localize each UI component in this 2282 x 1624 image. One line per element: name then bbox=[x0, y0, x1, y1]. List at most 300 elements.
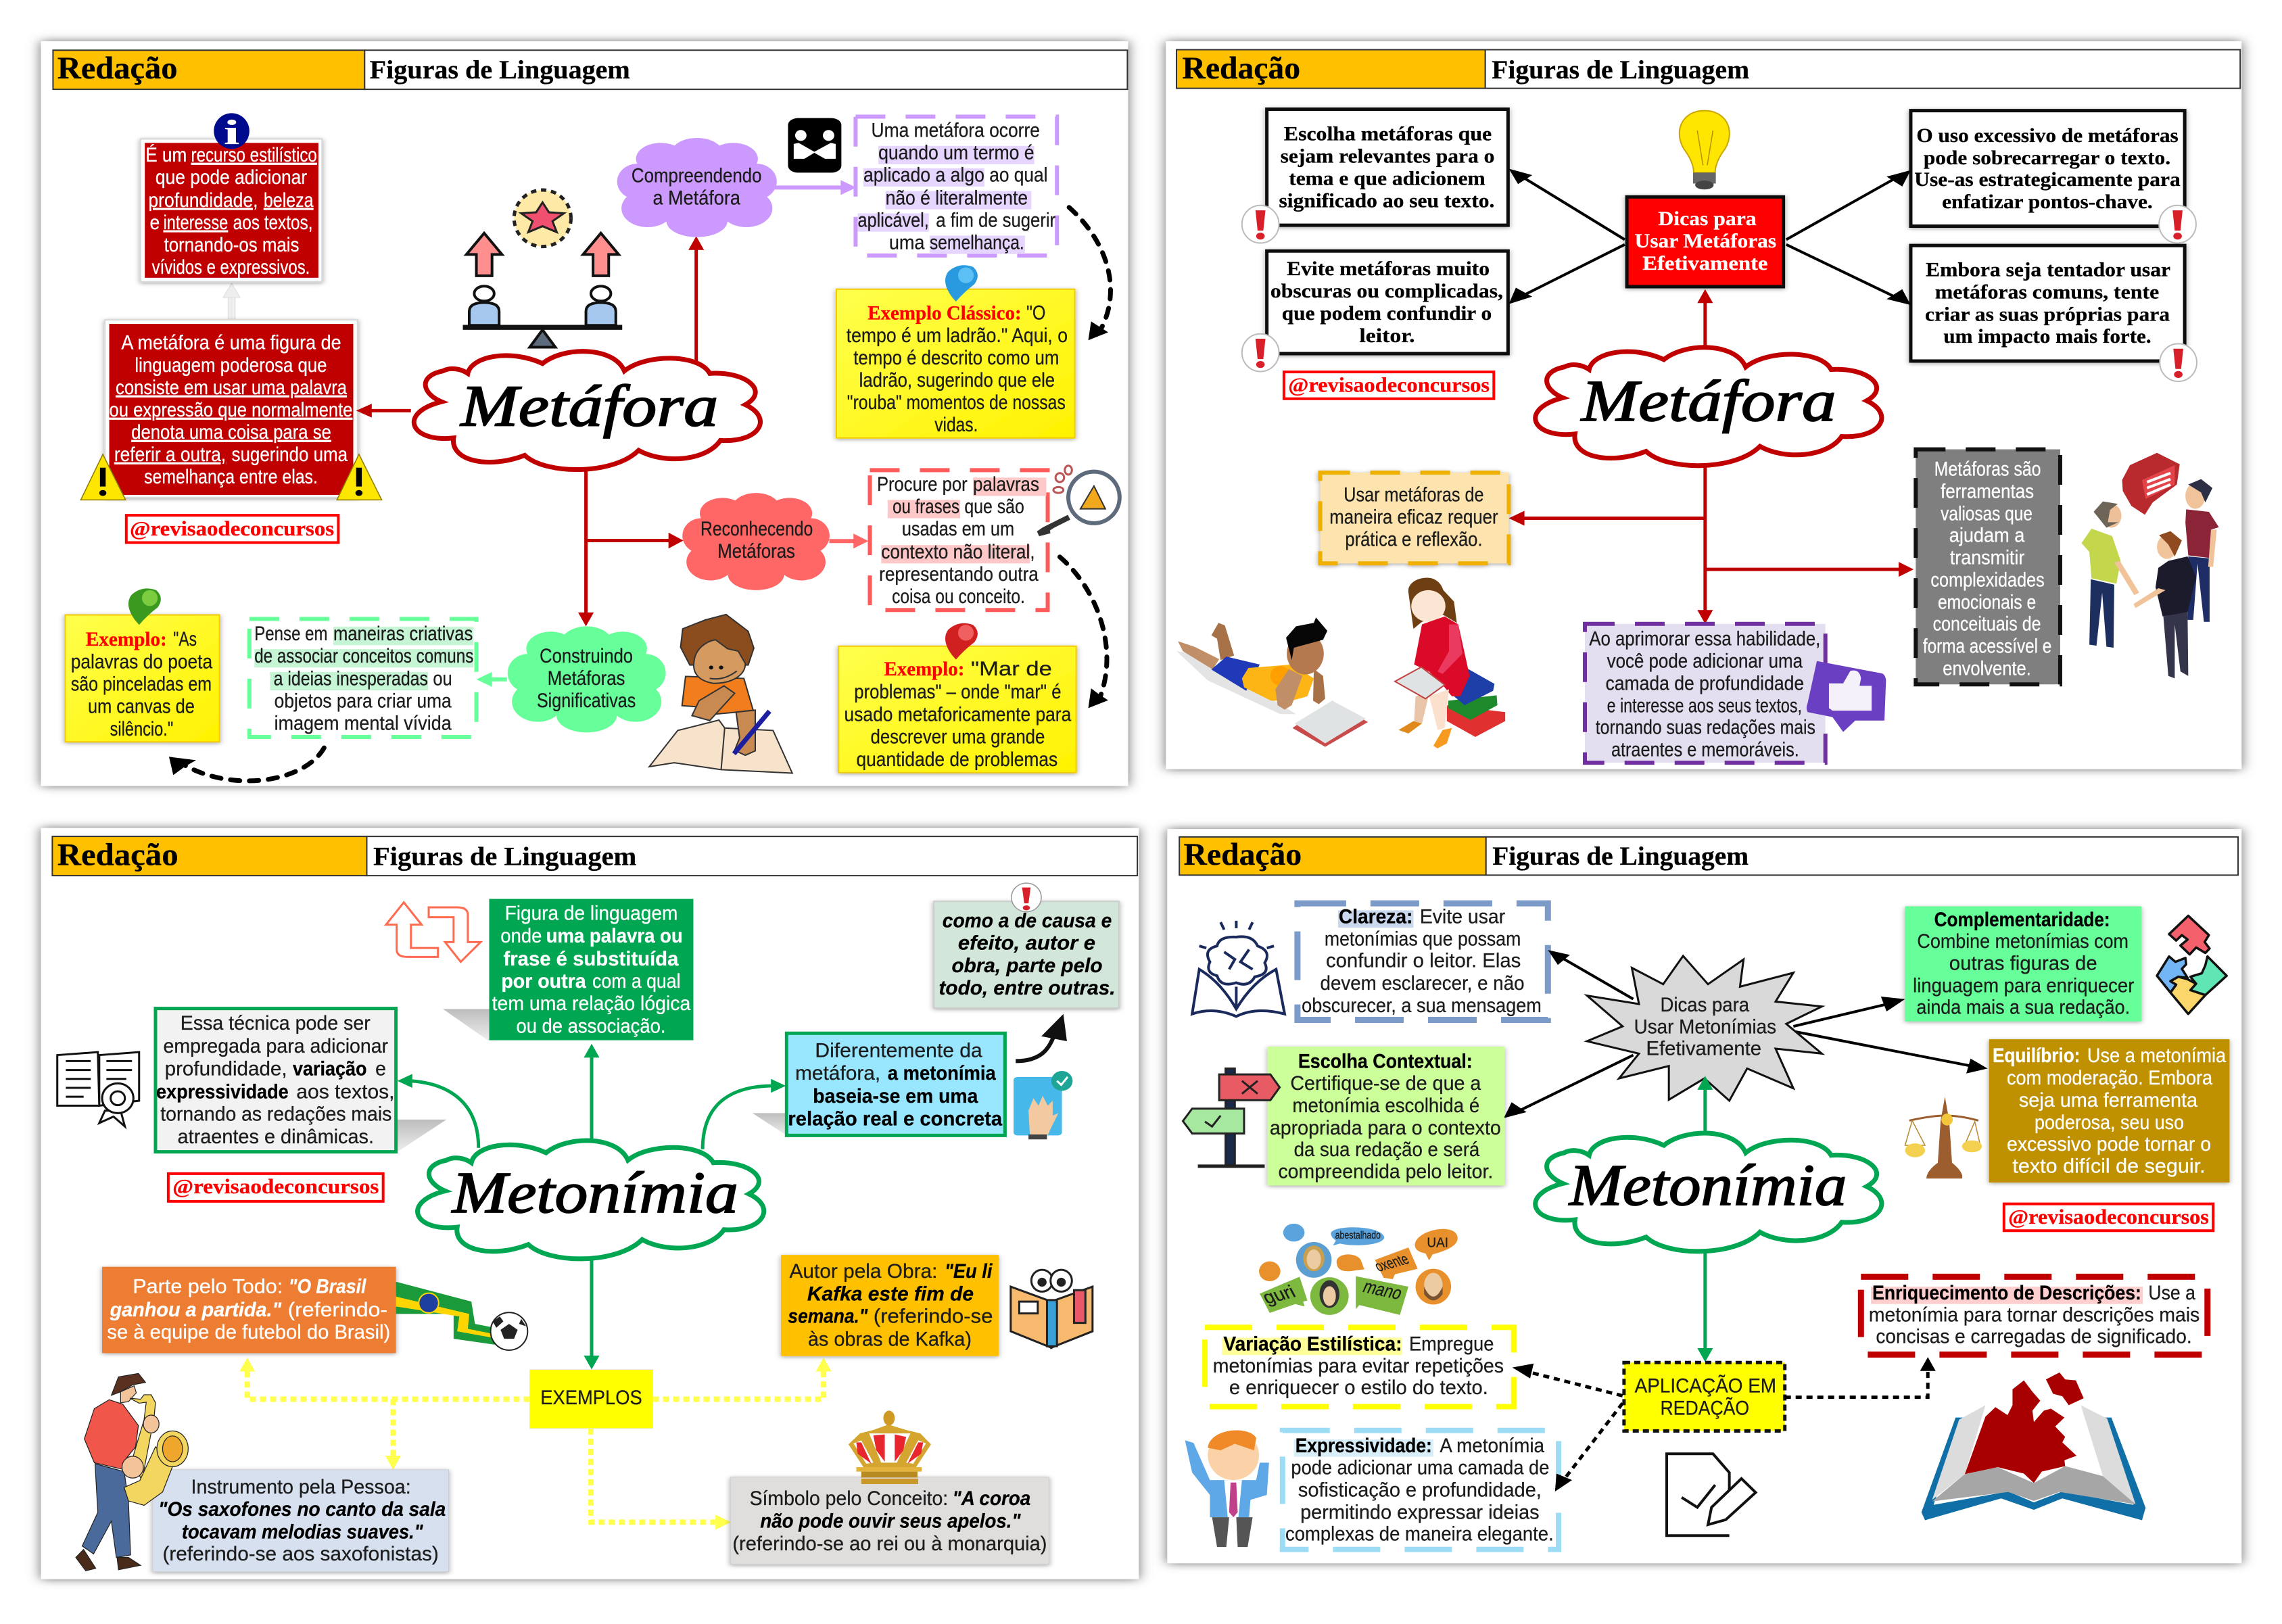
note: classic example: vidas. bbox=[934, 414, 978, 436]
example: symbol for concept: não pode ouvir seus apelos." bbox=[760, 1510, 1021, 1532]
icon: document with check and pen bbox=[1667, 1454, 1756, 1535]
note: sea of problems: usado metaforicamente para bbox=[845, 703, 1072, 725]
text block: valuable tools: complexidades bbox=[1930, 569, 2045, 591]
red arrows bbox=[1508, 289, 1913, 624]
purple arrow bbox=[774, 180, 856, 195]
handle tag bbox=[126, 515, 338, 542]
title: Metonímia: Metonímia bbox=[451, 1161, 738, 1225]
tip box: relevant metaphors: tema e que adicionem bbox=[1289, 168, 1485, 189]
heading bar: Figuras de Linguagem bbox=[1492, 54, 1749, 85]
box: EXEMPLOS: EXEMPLOS bbox=[540, 1386, 642, 1408]
text block: stylistic resource: que pode adicionar bbox=[156, 166, 307, 189]
panel: Dicas para Usar Metonímias bbox=[1167, 829, 2241, 1563]
box: application in writing: APLICAÇÃO EM bbox=[1635, 1375, 1776, 1397]
text block: clarity bbox=[1298, 903, 1548, 1020]
icon: scales of justice bbox=[1905, 1097, 1982, 1178]
icon: thumbs up bubble bbox=[1807, 661, 1886, 732]
icon: happy man bbox=[1185, 1431, 1269, 1547]
example: symbol for concept: "A coroa bbox=[953, 1487, 1030, 1509]
note: classic example: Exemplo Clássico: bbox=[867, 302, 1022, 324]
handle tag bbox=[168, 1174, 383, 1201]
icon: warning left bbox=[80, 454, 126, 500]
starburst: Dicas para Usar Metonímias: Efetivamente bbox=[1646, 1037, 1761, 1059]
text block: understanding: Uma metáfora ocorre bbox=[872, 119, 1040, 141]
cloud: Compreendendo a Metáfora bbox=[617, 138, 777, 237]
text block: difference: a metonímia bbox=[888, 1062, 996, 1084]
text block: expressiveness bbox=[1283, 1431, 1559, 1550]
heading bar: Redação bbox=[1184, 836, 1302, 871]
text block: valuable tools: Metáforas são bbox=[1934, 458, 2041, 480]
text block: recognising: contexto não literal, bbox=[881, 540, 1035, 563]
text block: improving skill: Ao aprimorar essa habilidade, bbox=[1589, 627, 1820, 650]
text block: metaphor definition bbox=[105, 320, 358, 498]
icon: boy lying reading bbox=[1176, 617, 1368, 747]
main cloud bbox=[1536, 1133, 1882, 1251]
text block: recognising: que são bbox=[964, 496, 1024, 518]
heading bar: Redação bbox=[1182, 50, 1300, 86]
heading bar: Redação bbox=[57, 50, 178, 86]
icon: boy studying bbox=[649, 615, 792, 773]
text block: expressiveness: Expressividade: bbox=[1295, 1434, 1432, 1456]
example: author for work: às obras de Kafka) bbox=[808, 1328, 972, 1350]
dashed arrows from application box bbox=[1513, 1357, 1936, 1491]
example: part for whole: "O Brasil bbox=[289, 1275, 366, 1297]
cloud: Reconhecendo Metáforas: Reconhecendo bbox=[700, 518, 813, 540]
icon: speech bubbles with regional words: guri bbox=[1259, 1281, 1299, 1308]
tip box: excessive use: O uso excessivo de metáforas bbox=[1916, 124, 2179, 146]
dashed arrow to poet note bbox=[169, 748, 324, 781]
text block: metaphor definition: ou expressão que normalmente bbox=[110, 399, 352, 421]
icon: balance with people and star bbox=[463, 190, 622, 348]
heading bar bbox=[1179, 836, 2238, 875]
example: symbol for concept bbox=[730, 1477, 1049, 1565]
note: sea of problems: "Mar de bbox=[971, 657, 1052, 679]
text block: cause and effect bbox=[934, 901, 1119, 1008]
example: instrument for person: (referindo-se aos saxofonistas) bbox=[162, 1542, 439, 1565]
text block: technique: expressividade bbox=[156, 1080, 289, 1103]
tip box: excessive use: enfatizar pontos-chave. bbox=[1942, 191, 2153, 213]
text block: understanding: a fim de sugerir bbox=[936, 209, 1055, 231]
tip box: create your own: Embora seja tentador usar bbox=[1926, 259, 2170, 281]
text block: stylistic variation bbox=[1205, 1327, 1514, 1407]
text block: recognising: usadas em um bbox=[902, 518, 1014, 540]
main cloud bbox=[418, 1141, 764, 1259]
text block: technique: atraentes e dinâmicas. bbox=[178, 1125, 374, 1148]
text block: clarity: devem esclarecer, e não bbox=[1321, 972, 1525, 994]
icon: light bulb bbox=[1680, 111, 1730, 189]
text block: technique: tornando as redações mais bbox=[160, 1103, 391, 1125]
icon: swap arrows bbox=[386, 903, 481, 962]
cloud: Reconhecendo Metáforas bbox=[682, 493, 830, 590]
icon: blue pin bbox=[945, 265, 978, 302]
example: part for whole: se à equipe de futebol do Brasil) bbox=[107, 1320, 390, 1343]
note: poet: silêncio." bbox=[110, 717, 173, 740]
starburst: Dicas para Usar Metonímias: Dicas para bbox=[1661, 993, 1750, 1016]
icon: girl reading on books bbox=[1395, 578, 1505, 748]
text block: recognising: coisa ou conceito. bbox=[892, 585, 1025, 607]
text block: technique: e bbox=[375, 1057, 386, 1080]
text block: stylistic variation: Variação Estilística: bbox=[1223, 1333, 1402, 1355]
text block: valuable tools: transmitir bbox=[1950, 546, 2024, 569]
starburst: Dicas para Usar Metonímias: Usar Metonímias bbox=[1634, 1016, 1776, 1038]
example: author for work bbox=[781, 1255, 999, 1356]
tip box: create your own: um impacto mais forte. bbox=[1943, 325, 2152, 347]
text block: difference: baseia-se em uma bbox=[813, 1084, 978, 1107]
text block: building: de associar conceitos comuns bbox=[254, 644, 473, 667]
text block: balance: poderosa, seu uso bbox=[2035, 1111, 2184, 1133]
cloud: Construindo Metáforas Significativas: Metáforas bbox=[548, 667, 625, 689]
icon: information bbox=[214, 113, 249, 151]
text block: technique: aos textos, bbox=[296, 1080, 395, 1103]
text block: recognising: representando outra bbox=[879, 563, 1039, 585]
icon: speech bubbles with regional words bbox=[1259, 1224, 1458, 1315]
text block: metaphor definition: sugerindo uma bbox=[232, 444, 348, 466]
text block: metaphor definition: semelhança entre elas. bbox=[144, 466, 318, 488]
icon: black curved arrow bbox=[1016, 1014, 1067, 1061]
text block: understanding: ao qual bbox=[989, 164, 1048, 186]
text block: stylistic resource: recurso estilístico bbox=[191, 144, 317, 166]
tip box: relevant metaphors: Escolha metáforas que bbox=[1284, 123, 1492, 145]
text block: stylistic resource: tornando-os mais bbox=[164, 233, 300, 256]
text block: balance: seja uma ferramenta bbox=[2019, 1089, 2198, 1111]
example: author for work: semana." bbox=[788, 1305, 868, 1327]
black arrows from starburst bbox=[1504, 950, 1988, 1118]
text block: cause and effect: todo, entre outras. bbox=[939, 976, 1115, 999]
text block: definition: onde bbox=[500, 924, 542, 947]
icon: puzzle pieces bbox=[2157, 915, 2227, 1014]
handle tag bbox=[1284, 372, 1494, 399]
text block: stylistic resource: profundidade, bbox=[148, 189, 258, 211]
text block: building bbox=[249, 619, 477, 737]
arrow: pale link between definition boxes bbox=[223, 283, 240, 320]
note: poet: palavras do poeta bbox=[71, 650, 213, 673]
text block: technique bbox=[156, 1009, 396, 1152]
panel: Metáfora overview bbox=[41, 41, 1128, 786]
text block: valuable tools: valiosas que bbox=[1941, 502, 2033, 525]
icon: speech bubbles with regional words: mano bbox=[1360, 1276, 1406, 1304]
text block: recognising: palavras bbox=[973, 473, 1039, 496]
text block: stylistic resource: beleza bbox=[264, 189, 314, 211]
text block: stylistic variation: e enriquecer o estilo do texto. bbox=[1229, 1377, 1488, 1399]
text block: understanding: não é literalmente bbox=[886, 187, 1028, 209]
text block: clarity: Evite usar bbox=[1420, 905, 1505, 928]
text block: expressiveness: permitindo expressar ideias bbox=[1300, 1501, 1540, 1523]
text block: understanding bbox=[855, 116, 1057, 256]
center box: Dicas: Usar Metáforas bbox=[1635, 230, 1776, 252]
icon: hand and check bbox=[1014, 1071, 1072, 1139]
text block: stylistic resource: aos textos, bbox=[233, 211, 313, 233]
cloud: Compreendendo a Metáfora: Compreendendo bbox=[632, 164, 762, 187]
text block: technique: variação bbox=[293, 1057, 366, 1080]
icon: red pin bbox=[945, 623, 978, 660]
main cloud bbox=[414, 352, 760, 470]
cloud: Reconhecendo Metáforas: Metáforas bbox=[717, 540, 795, 563]
tip box: create your own: criar as suas próprias para bbox=[1925, 304, 2170, 325]
text block: practice: maneira eficaz requer bbox=[1329, 506, 1498, 528]
panel: Metonímia overview bbox=[41, 828, 1139, 1579]
note: classic example: "O bbox=[1026, 302, 1045, 324]
text block: balance: texto difícil de seguir. bbox=[2012, 1155, 2206, 1177]
center box: Dicas bbox=[1627, 197, 1784, 287]
text block: stylistic resource: interesse bbox=[164, 211, 228, 233]
text block: stylistic resource bbox=[141, 139, 322, 282]
text block: understanding: quando um termo é bbox=[878, 141, 1035, 164]
example: part for whole: (referindo- bbox=[288, 1298, 387, 1321]
text block: complementarity: linguagem para enriquecer bbox=[1913, 974, 2134, 997]
text block: contextual choice bbox=[1268, 1047, 1504, 1185]
icon: exclamation badge bbox=[1012, 883, 1041, 912]
note: sea of problems bbox=[838, 646, 1076, 773]
text block: enriching descriptions bbox=[1861, 1276, 2208, 1355]
note: classic example: tempo é um ladrão." Aqui, o bbox=[847, 324, 1068, 347]
text block: recognising bbox=[870, 470, 1048, 610]
center box: Dicas: Efetivamente bbox=[1642, 252, 1767, 274]
cloud: Compreendendo a Metáfora: a Metáfora bbox=[653, 187, 741, 209]
cloud: Construindo Metáforas Significativas bbox=[508, 626, 666, 732]
text block: technique: empregada para adicionar bbox=[164, 1034, 388, 1057]
text block: clarity: Clareza: bbox=[1339, 905, 1412, 928]
heading bar: Redação bbox=[57, 837, 179, 872]
dashed arrow to example bbox=[1060, 557, 1108, 708]
green arrows bbox=[1697, 1076, 1713, 1362]
example: author for work: (referindo-se bbox=[874, 1305, 993, 1327]
text block: stylistic variation: metonímias para evitar repetições bbox=[1213, 1354, 1504, 1377]
box: EXEMPLOS bbox=[529, 1370, 653, 1429]
text block: complementarity: Combine metonímias com bbox=[1917, 930, 2129, 953]
tip box: relevant metaphors bbox=[1267, 109, 1508, 225]
text block: complementarity bbox=[1905, 907, 2141, 1022]
handle tag: @revisaodeconcursos bbox=[2008, 1205, 2209, 1228]
text block: contextual choice: metonímia escolhida é bbox=[1293, 1094, 1479, 1116]
tip box: avoid obscure: leitor. bbox=[1359, 325, 1415, 347]
note: poet: Exemplo: bbox=[86, 628, 167, 650]
text block: building: Pense em bbox=[254, 622, 328, 644]
text block: improving skill: tornando suas redações mais bbox=[1596, 716, 1815, 738]
text block: valuable tools bbox=[1916, 450, 2060, 684]
box: application in writing: REDAÇÃO bbox=[1661, 1397, 1749, 1419]
icon: crown bbox=[849, 1410, 931, 1484]
text block: difference: relação real e concreta bbox=[788, 1107, 1003, 1130]
tip box: excessive use bbox=[1911, 111, 2185, 226]
text block: building: imagem mental vívida bbox=[275, 712, 452, 734]
cloud: Construindo Metáforas Significativas: Construindo bbox=[540, 644, 633, 667]
example: part for whole: ganhou a partida." bbox=[110, 1298, 282, 1321]
tip box: create your own bbox=[1911, 245, 2185, 361]
tip box: excessive use: pode sobrecarregar o texto. bbox=[1924, 147, 2170, 168]
heading bar bbox=[53, 50, 1127, 89]
text block: definition: com a qual bbox=[592, 970, 681, 992]
note: poet: são pinceladas em bbox=[71, 673, 212, 695]
handle tag: @revisaodeconcursos bbox=[172, 1175, 379, 1198]
text block: definition: ou de associação. bbox=[516, 1015, 665, 1037]
text block: stylistic resource: e bbox=[150, 211, 160, 233]
text block: cause and effect: efeito, autor e bbox=[958, 932, 1095, 954]
dashed arrow to classic example bbox=[1069, 208, 1110, 340]
text block: practice: prática e reflexão. bbox=[1345, 528, 1482, 550]
note: sea of problems: descrever uma grande bbox=[871, 725, 1045, 748]
icon: book with eyes bbox=[1011, 1270, 1093, 1347]
box: application in writing bbox=[1624, 1362, 1785, 1431]
text block: building: ou bbox=[433, 667, 452, 690]
heading bar: Figuras de Linguagem bbox=[373, 841, 636, 871]
text block: technique: profundidade, bbox=[165, 1057, 287, 1080]
text block: practice: Usar metáforas de bbox=[1344, 483, 1484, 506]
center box: Dicas: Dicas para bbox=[1658, 208, 1757, 230]
dotted yellow connectors bbox=[239, 1358, 832, 1529]
panel: Dicas para Usar Metáforas bbox=[1166, 41, 2241, 769]
text block: difference: Diferentemente da bbox=[815, 1039, 982, 1061]
text block: understanding: aplicado a algo bbox=[863, 164, 984, 186]
note: classic example: tempo é descrito como um bbox=[853, 346, 1059, 369]
text block: building: maneiras criativas bbox=[333, 622, 473, 644]
icon: saxophone player bbox=[76, 1373, 188, 1571]
text block: contextual choice: Certifique-se de que a bbox=[1290, 1072, 1481, 1094]
note: sea of problems: problemas" – onde "mar" é bbox=[854, 680, 1062, 702]
text block: difference bbox=[786, 1033, 1005, 1135]
note: classic example: "rouba" momentos de nossas bbox=[847, 391, 1066, 414]
heading bar bbox=[1176, 49, 2240, 89]
tip box: avoid obscure: Evite metáforas muito bbox=[1287, 258, 1490, 280]
icon: Brazil ribbon and football bbox=[396, 1282, 527, 1350]
text block: definition: por outra bbox=[501, 970, 586, 992]
icon: speech bubbles with regional words: abestalhado bbox=[1335, 1229, 1381, 1241]
note: sea of problems: Exemplo: bbox=[884, 658, 964, 679]
handle tag: @revisaodeconcursos bbox=[130, 518, 334, 540]
text block: valuable tools: forma acessível e bbox=[1923, 635, 2051, 657]
green arrows from cloud bbox=[398, 1044, 786, 1370]
handle tag bbox=[2004, 1204, 2213, 1231]
text block: valuable tools: conceituais de bbox=[1933, 613, 2041, 635]
text block: clarity: obscurecer, a sua mensagem bbox=[1302, 994, 1542, 1016]
note: poet: "As bbox=[173, 627, 197, 650]
text block: understanding: semelhança. bbox=[930, 231, 1024, 254]
example: symbol for concept: Símbolo pelo Conceito: bbox=[750, 1487, 948, 1509]
tip box: create your own: metáforas comuns, tente bbox=[1935, 281, 2159, 303]
text block: definition: tem uma relação lógica bbox=[492, 992, 691, 1014]
text block: cause and effect: obra, parte pelo bbox=[951, 954, 1103, 977]
text block: contextual choice: apropriada para o contexto bbox=[1270, 1116, 1501, 1139]
text block: definition: Figura de linguagem bbox=[505, 902, 678, 924]
icon: three people talking bbox=[2082, 453, 2219, 678]
text block: improving skill bbox=[1585, 624, 1826, 763]
example: symbol for concept: (referindo-se ao rei ou à monarquia) bbox=[732, 1533, 1047, 1555]
text block: metaphor definition: linguagem poderosa que bbox=[135, 354, 327, 377]
cloud: Construindo Metáforas Significativas: Significativas bbox=[537, 689, 636, 711]
text block: valuable tools: emocionais e bbox=[1938, 591, 2036, 613]
text block: understanding: uma bbox=[889, 231, 925, 254]
icon: book with red puzzle bbox=[1922, 1372, 2145, 1520]
text block: clarity: metonímias que possam bbox=[1325, 928, 1521, 950]
text block: recognising: Procure por bbox=[877, 473, 968, 496]
icon: magnifier with warning bbox=[1039, 466, 1120, 533]
text block: metaphor definition: A metáfora é uma figura de bbox=[121, 331, 341, 354]
icon: brain over book bbox=[1192, 921, 1285, 1016]
arrows: from cloud to branches bbox=[356, 236, 704, 626]
text block: improving skill: e interesse aos seus textos, bbox=[1607, 694, 1802, 717]
heading bar bbox=[52, 836, 1137, 876]
text block: balance bbox=[1989, 1039, 2229, 1183]
title: Metonímia: Metonímia bbox=[1568, 1153, 1847, 1218]
heading bar: Figuras de Linguagem bbox=[1492, 840, 1749, 871]
icons: exclamation badges bbox=[1242, 206, 2197, 381]
text block: definition bbox=[489, 899, 693, 1041]
text block: contextual choice: Escolha Contextual: bbox=[1298, 1050, 1473, 1072]
text block: improving skill: atraentes e memoráveis. bbox=[1611, 738, 1799, 761]
title: Metáfora: Metáfora bbox=[459, 374, 718, 439]
example: author for work: "Eu li bbox=[945, 1260, 993, 1282]
text block: building: objetos para criar uma bbox=[275, 690, 452, 712]
note: poet: um canvas de bbox=[88, 695, 195, 717]
text block: expressiveness: complexas de maneira elegante. bbox=[1285, 1523, 1554, 1545]
icon: speech bubbles with regional words: UAI bbox=[1427, 1235, 1448, 1250]
tip box: excessive use: Use-as estrategicamente para bbox=[1914, 168, 2181, 191]
text block: clarity: confundir o leitor. Elas bbox=[1326, 949, 1521, 972]
text block: contextual choice: compreendida pelo leitor. bbox=[1278, 1160, 1493, 1183]
icon: warning right bbox=[337, 454, 382, 500]
example: instrument for person bbox=[153, 1470, 448, 1572]
text block: stylistic variation: Empregue bbox=[1409, 1333, 1494, 1355]
text block: building: a ideias inesperadas bbox=[274, 667, 428, 690]
text block: metaphor definition: referir a outra, bbox=[114, 444, 226, 466]
main cloud bbox=[1536, 348, 1882, 466]
tip box: avoid obscure: obscuras ou complicadas, bbox=[1270, 280, 1503, 302]
handle tag: @revisaodeconcursos bbox=[1288, 374, 1490, 397]
note: poet bbox=[65, 615, 220, 742]
text block: stylistic resource: vívidos e expressivos. bbox=[152, 256, 310, 278]
note: classic example: ladrão, sugerindo que ele bbox=[859, 368, 1055, 391]
icon: book with certificate seal bbox=[57, 1052, 139, 1126]
text block: complementarity: outras figuras de bbox=[1949, 952, 2097, 974]
text block: expressiveness: A metonímia bbox=[1440, 1434, 1545, 1456]
text block: enriching descriptions: Use a bbox=[2148, 1281, 2195, 1304]
text block: valuable tools: envolvente. bbox=[1943, 657, 2031, 679]
icon: green pin bbox=[128, 588, 161, 625]
green arrow bbox=[477, 672, 507, 687]
example: author for work: Autor pela Obra: bbox=[790, 1260, 937, 1282]
text block: expressiveness: pode adicionar uma camada de bbox=[1291, 1456, 1549, 1479]
text block: metaphor definition: consiste em usar uma palavra bbox=[116, 376, 348, 399]
icon: information: i bbox=[224, 113, 239, 151]
text block: definition: uma palavra ou bbox=[546, 924, 683, 947]
text block: metaphor definition: denota uma coisa para se bbox=[131, 421, 331, 444]
text block: practice bbox=[1321, 473, 1508, 563]
tip box: relevant metaphors: sejam relevantes para o bbox=[1281, 145, 1494, 167]
text block: valuable tools: ferramentas bbox=[1941, 480, 2034, 502]
pink arrow bbox=[829, 533, 868, 548]
text block: improving skill: você pode adicionar uma bbox=[1607, 650, 1803, 672]
example: instrument for person: "Os saxofones no canto da sala bbox=[158, 1498, 446, 1520]
starburst: Dicas para Usar Metonímias bbox=[1587, 956, 1822, 1101]
text block: expressiveness: sofisticação e profundidade, bbox=[1298, 1479, 1542, 1501]
tip box: relevant metaphors: significado ao seu texto. bbox=[1279, 190, 1494, 212]
black arrows to tips bbox=[1508, 168, 1911, 305]
example: instrument for person: Instrumento pela Pessoa: bbox=[191, 1475, 411, 1498]
text block: stylistic resource: É um bbox=[145, 144, 187, 166]
example: author for work: Kafka este fim de bbox=[807, 1283, 974, 1305]
icon: speech bubbles with regional words: oxente bbox=[1371, 1250, 1412, 1275]
heading bar: Figuras de Linguagem bbox=[370, 54, 630, 85]
text block: complementarity: ainda mais a sua redação. bbox=[1916, 996, 2130, 1018]
tip box: avoid obscure bbox=[1267, 251, 1508, 354]
text block: recognising: ou frases bbox=[893, 496, 959, 518]
text block: balance: Equilíbrio: bbox=[1993, 1044, 2080, 1066]
icon: handshake bbox=[788, 118, 841, 172]
text block: difference: metáfora, bbox=[795, 1062, 880, 1084]
icon: signpost bbox=[1183, 1068, 1280, 1166]
text block: definition: frase é substituída bbox=[504, 947, 679, 970]
text block: improving skill: camada de profundidade bbox=[1606, 672, 1804, 694]
note: sea of problems: quantidade de problemas bbox=[856, 748, 1057, 771]
